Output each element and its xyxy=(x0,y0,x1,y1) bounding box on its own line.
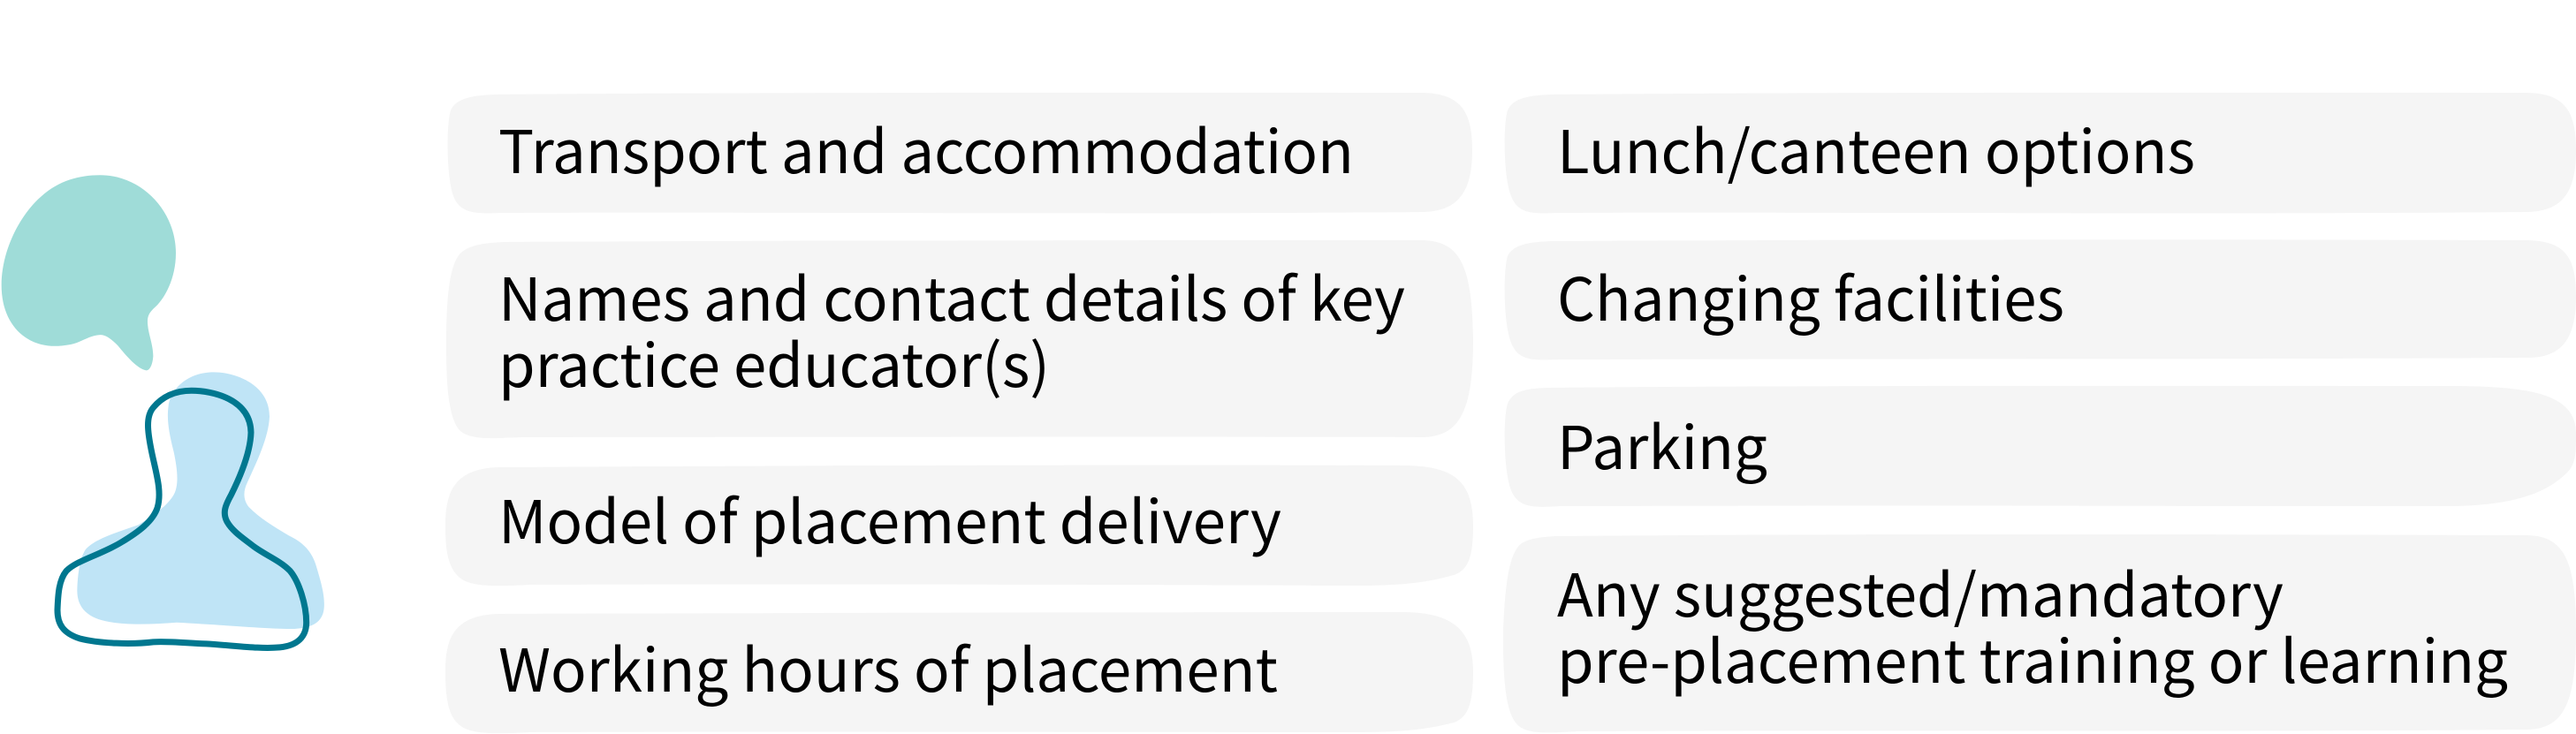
icon: person outline xyxy=(57,390,307,647)
label: Working hours of placement xyxy=(498,624,1278,709)
icon: person with speech bubble xyxy=(2,175,324,647)
panel: changing facilities xyxy=(1505,239,2576,359)
panel: suggested or mandatory training xyxy=(1503,534,2576,732)
label: Names and contact details of key xyxy=(498,253,1405,338)
panel: names and contact details xyxy=(446,240,1473,438)
panel background xyxy=(445,612,1473,733)
icon: person fill xyxy=(77,372,324,629)
label line 2: pre-placement training or learning xyxy=(1557,615,2508,700)
panel background xyxy=(1505,93,2576,213)
label line 2: practice educator(s) xyxy=(498,319,1050,405)
panel background xyxy=(445,465,1473,586)
label: Changing facilities xyxy=(1557,253,2064,338)
panel background xyxy=(446,240,1473,438)
icon: speech bubble xyxy=(2,175,176,370)
panel: transport and accommodation xyxy=(448,93,1472,213)
panel background xyxy=(1503,534,2576,732)
panel background xyxy=(1505,386,2576,507)
label: Any suggested/mandatory xyxy=(1557,549,2283,634)
panel: lunch and canteen options xyxy=(1505,93,2576,213)
panel background xyxy=(1505,239,2576,359)
panel: model of placement delivery xyxy=(445,465,1473,586)
label: Parking xyxy=(1557,401,1767,487)
label: Model of placement delivery xyxy=(498,475,1281,561)
panel: parking xyxy=(1505,386,2576,507)
panel: working hours of placement xyxy=(445,612,1473,733)
panel background xyxy=(448,93,1472,213)
label: Transport and accommodation xyxy=(498,105,1354,191)
label: Lunch/canteen options xyxy=(1557,105,2195,191)
